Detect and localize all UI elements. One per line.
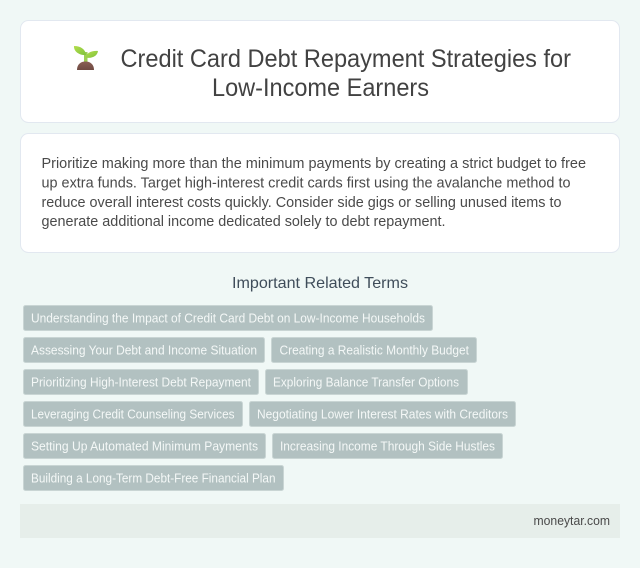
tag: balance transfer <box>266 370 468 394</box>
summary paragraph: reduce overall interest costs quickly. Consider side gigs or selling unused items to <box>42 195 562 211</box>
tag: side hustles <box>272 434 502 458</box>
footer source: moneytar.com <box>534 514 610 528</box>
tag: financial plan: Building a Long-Term Debt-Free Financial Plan <box>31 471 276 485</box>
summary paragraph: generate additional income dedicated solely to debt repayment. <box>42 214 446 230</box>
panel: title card <box>20 20 620 122</box>
title: Credit Card Debt Repayment Strategies for <box>120 45 571 73</box>
tag: automated payments: Setting Up Automated Minimum Payments <box>31 439 258 453</box>
tag: financial plan <box>24 466 284 490</box>
heading: important related terms: Important Related Terms <box>232 275 408 292</box>
footer <box>20 504 620 538</box>
tag: negotiating rates: Negotiating Lower Interest Rates with Creditors <box>257 407 508 421</box>
tag: negotiating rates <box>250 402 516 426</box>
tag: monthly budget: Creating a Realistic Monthly Budget <box>280 343 469 357</box>
summary paragraph <box>42 156 586 230</box>
tag: credit counseling: Leveraging Credit Counseling Services <box>31 407 234 421</box>
tag: understanding impact <box>24 306 432 330</box>
icon: seedling <box>74 46 98 70</box>
summary paragraph: up extra funds. Target high-interest credit cards first using the avalanche method to <box>42 176 570 192</box>
tag: balance transfer: Exploring Balance Transfer Options <box>273 375 459 389</box>
panel: summary text <box>20 134 620 252</box>
tag: assessing debt: Assessing Your Debt and Income Situation <box>31 343 257 357</box>
tag: side hustles: Increasing Income Through Side Hustles <box>280 439 495 453</box>
title: Low-Income Earners <box>212 74 429 102</box>
tag: credit counseling <box>24 402 242 426</box>
tag: high-interest repayment <box>24 370 258 394</box>
tag: automated payments <box>24 434 266 458</box>
tag: understanding impact: Understanding the Impact of Credit Card Debt on Low-Income Households <box>31 311 425 325</box>
summary paragraph: Prioritize making more than the minimum payments by creating a strict budget to free <box>42 156 586 172</box>
tag: assessing debt <box>24 338 264 362</box>
title <box>120 45 571 102</box>
tag: high-interest repayment: Prioritizing High-Interest Debt Repayment <box>31 375 251 389</box>
related terms tags <box>24 306 516 490</box>
tag: monthly budget <box>272 338 476 362</box>
